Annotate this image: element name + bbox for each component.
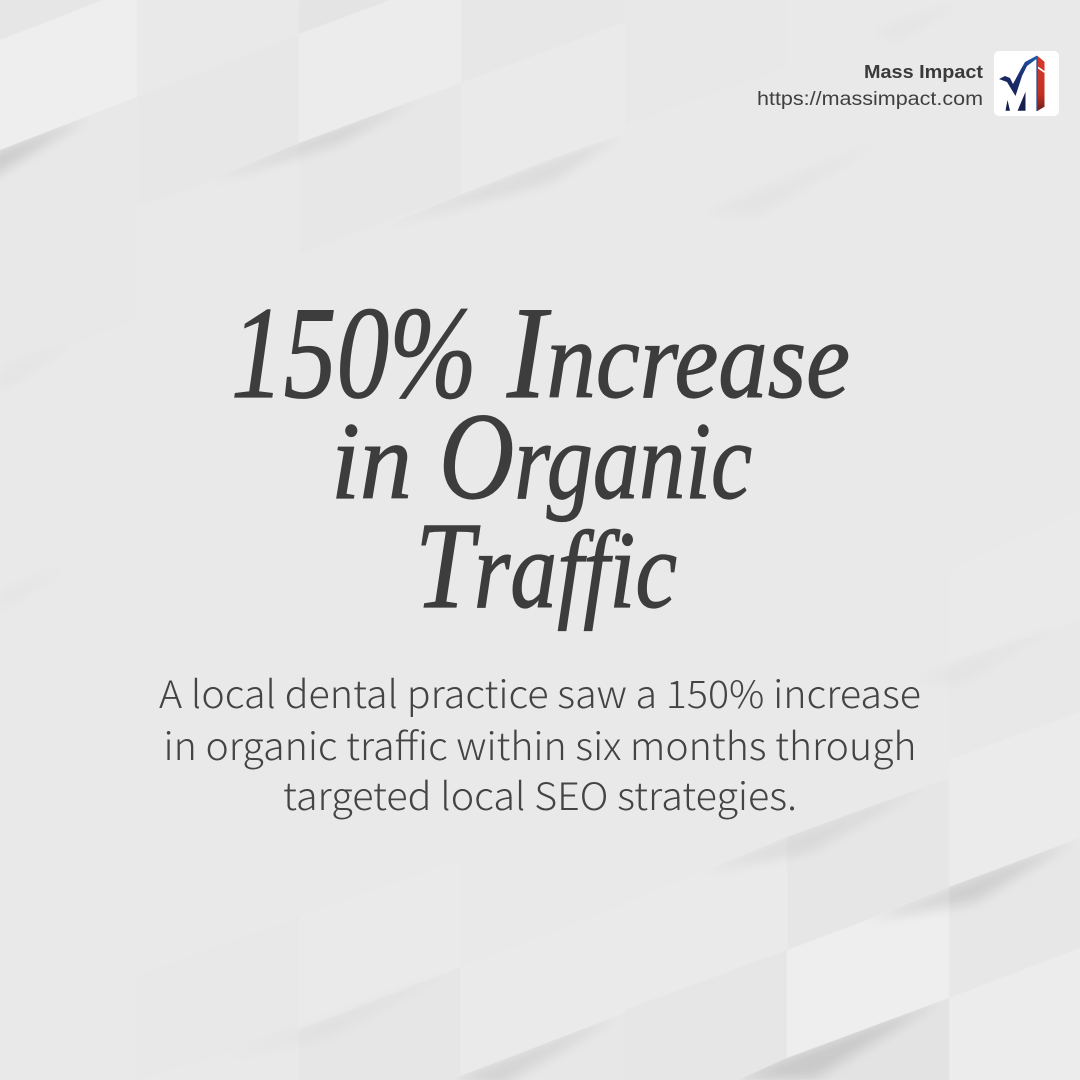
description text: A local dental practice saw a 150% increase bbox=[159, 664, 921, 719]
title bbox=[231, 279, 850, 634]
description text: targeted local SEO strategies. bbox=[283, 766, 797, 821]
title: in bbox=[331, 400, 412, 522]
brand url: https://massimpact.com bbox=[757, 89, 983, 110]
logo card bbox=[994, 51, 1059, 116]
title: Increase bbox=[506, 279, 850, 426]
brand name: Mass Impact bbox=[864, 61, 983, 82]
description text: in organic traffic within six months through bbox=[164, 716, 916, 771]
title: 150% bbox=[231, 279, 477, 426]
title: Traffic bbox=[415, 497, 677, 634]
brand block: name, url and logo bbox=[757, 51, 1059, 116]
title: Organic bbox=[439, 388, 752, 525]
description text bbox=[159, 664, 921, 821]
